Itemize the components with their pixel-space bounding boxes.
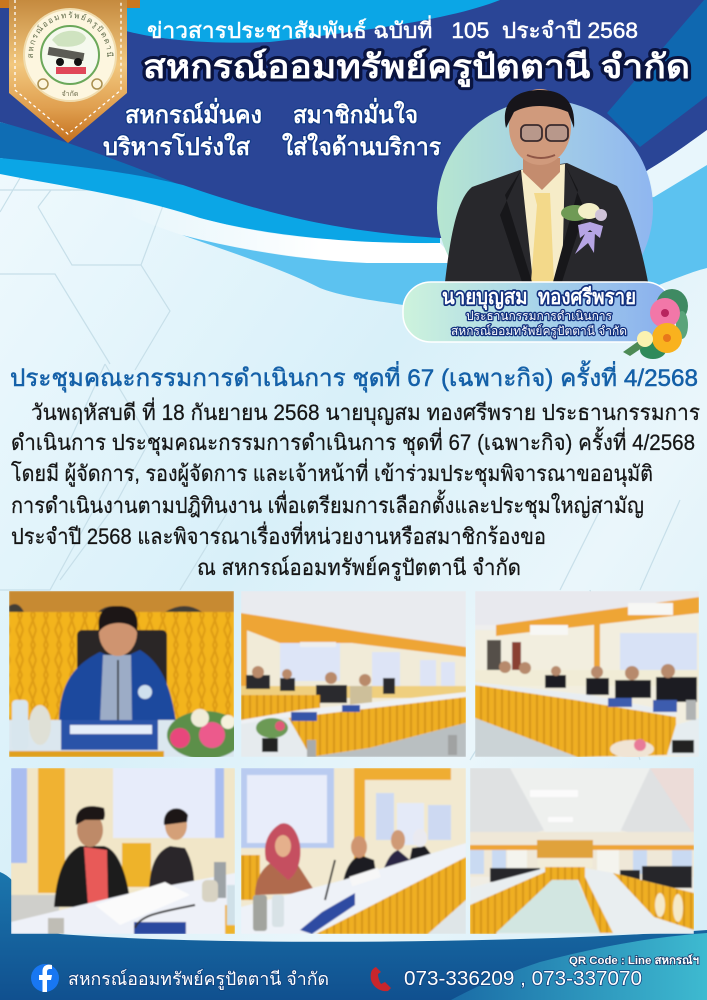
name plate: นายบุญสม ทองศรีพราย bbox=[442, 285, 636, 311]
slogans: สมาชิกมั่นใจ bbox=[293, 97, 418, 129]
corsage bbox=[561, 203, 607, 254]
portrait: chairman bbox=[437, 89, 653, 316]
photo 6: wide meeting room view bbox=[470, 768, 694, 934]
right white swoosh bbox=[648, 130, 707, 197]
body paragraph bbox=[11, 397, 700, 581]
neck and face bbox=[523, 158, 560, 190]
icon: facebook bbox=[31, 964, 59, 992]
QR code caption: QR Code : Line สหกรณ์ฯ bbox=[569, 954, 699, 967]
footer: facebook bbox=[31, 964, 329, 992]
slogans: บริหารโปร่งใส bbox=[103, 132, 250, 161]
icon: phone bbox=[371, 967, 391, 991]
footer: facebook: สหกรณ์ออมทรัพย์ครูปัตตานี จำกัด bbox=[68, 969, 329, 990]
lower light-blue sliver bbox=[182, 235, 450, 305]
photo 2: meeting room left view bbox=[241, 591, 466, 757]
photo 4: two officers seated bbox=[11, 768, 235, 934]
header left mid-blue wave bbox=[0, 122, 183, 186]
body paragraph: การดำเนินงานตามปฎิทินงาน เพื่อเตรียมการเลือกตั้งและประชุมใหญ่สามัญ bbox=[11, 490, 644, 519]
footer: phone: 073-336209 , 073-337070 bbox=[404, 968, 642, 990]
photo 1: chairman at the table bbox=[9, 591, 243, 759]
lapels bbox=[500, 164, 585, 282]
white swoosh band bbox=[100, 190, 460, 264]
footer teal swoosh bbox=[451, 933, 707, 1000]
seal caption: จำกัด bbox=[62, 90, 78, 98]
shirt bbox=[521, 164, 565, 282]
hexagon line pattern bbox=[0, 178, 680, 760]
cooperative seal bbox=[23, 8, 117, 102]
name plate: สหกรณ์ออมทรัพย์ครูปัตตานี จำกัด bbox=[451, 324, 627, 339]
right light-blue area bbox=[630, 165, 707, 292]
body paragraph: โดยมี ผู้จัดการ, รองผู้จัดการ และเจ้าหน้าที่ เข้าร่วมประชุมพิจารณาขออนุมัติ bbox=[11, 458, 653, 487]
body paragraph: ณ สหกรณ์ออมทรัพย์ครูปัตตานี จำกัด bbox=[197, 555, 521, 581]
footer wave bbox=[0, 872, 707, 1000]
header light-blue wave bbox=[0, 158, 440, 243]
header right mid-blue wedge bbox=[607, 0, 707, 147]
header dark blue shape bbox=[0, 0, 707, 238]
header top light-blue swoosh bbox=[100, 0, 500, 43]
tropical flowers bbox=[623, 289, 688, 359]
seal ring text: สหกรณ์ออมทรัพย์ครูปัตตานี bbox=[28, 11, 114, 58]
photo 3: meeting room right view bbox=[475, 591, 699, 758]
main title: สหกรณ์ออมทรัพย์ครูปัตตานี จำกัด bbox=[143, 48, 690, 88]
portrait circle bbox=[437, 100, 653, 316]
tie bbox=[531, 193, 554, 282]
glasses bbox=[521, 125, 568, 141]
headline: ประชุมคณะกรรมการดำเนินการ ชุดที่ 67 (เฉพาะกิจ) ครั้งที่ 4/2568 bbox=[10, 360, 698, 393]
mouth bbox=[527, 155, 555, 158]
body paragraph: ประจำปี 2568 และพิจารณาเรื่องที่หน่วยงานหรือสมาชิกร้องขอ bbox=[11, 521, 546, 549]
photo 5: officers along the table bbox=[241, 768, 466, 934]
ribbon stitching bbox=[15, 0, 121, 134]
newsletter issue line: ข่าวสารประชาสัมพันธ์ ฉบับที่ 105 ประจำปี 2568 bbox=[147, 15, 638, 43]
ribbon badge bbox=[0, 0, 140, 143]
name plate bbox=[403, 282, 673, 342]
slogans: สหกรณ์มั่นคง bbox=[125, 97, 262, 129]
slogans: ใส่ใจด้านบริการ bbox=[282, 132, 441, 161]
name plate: ประธานกรรมการดำเนินการ bbox=[466, 309, 613, 323]
hair bbox=[505, 90, 574, 128]
slogans bbox=[103, 97, 441, 161]
jacket bbox=[445, 163, 648, 282]
